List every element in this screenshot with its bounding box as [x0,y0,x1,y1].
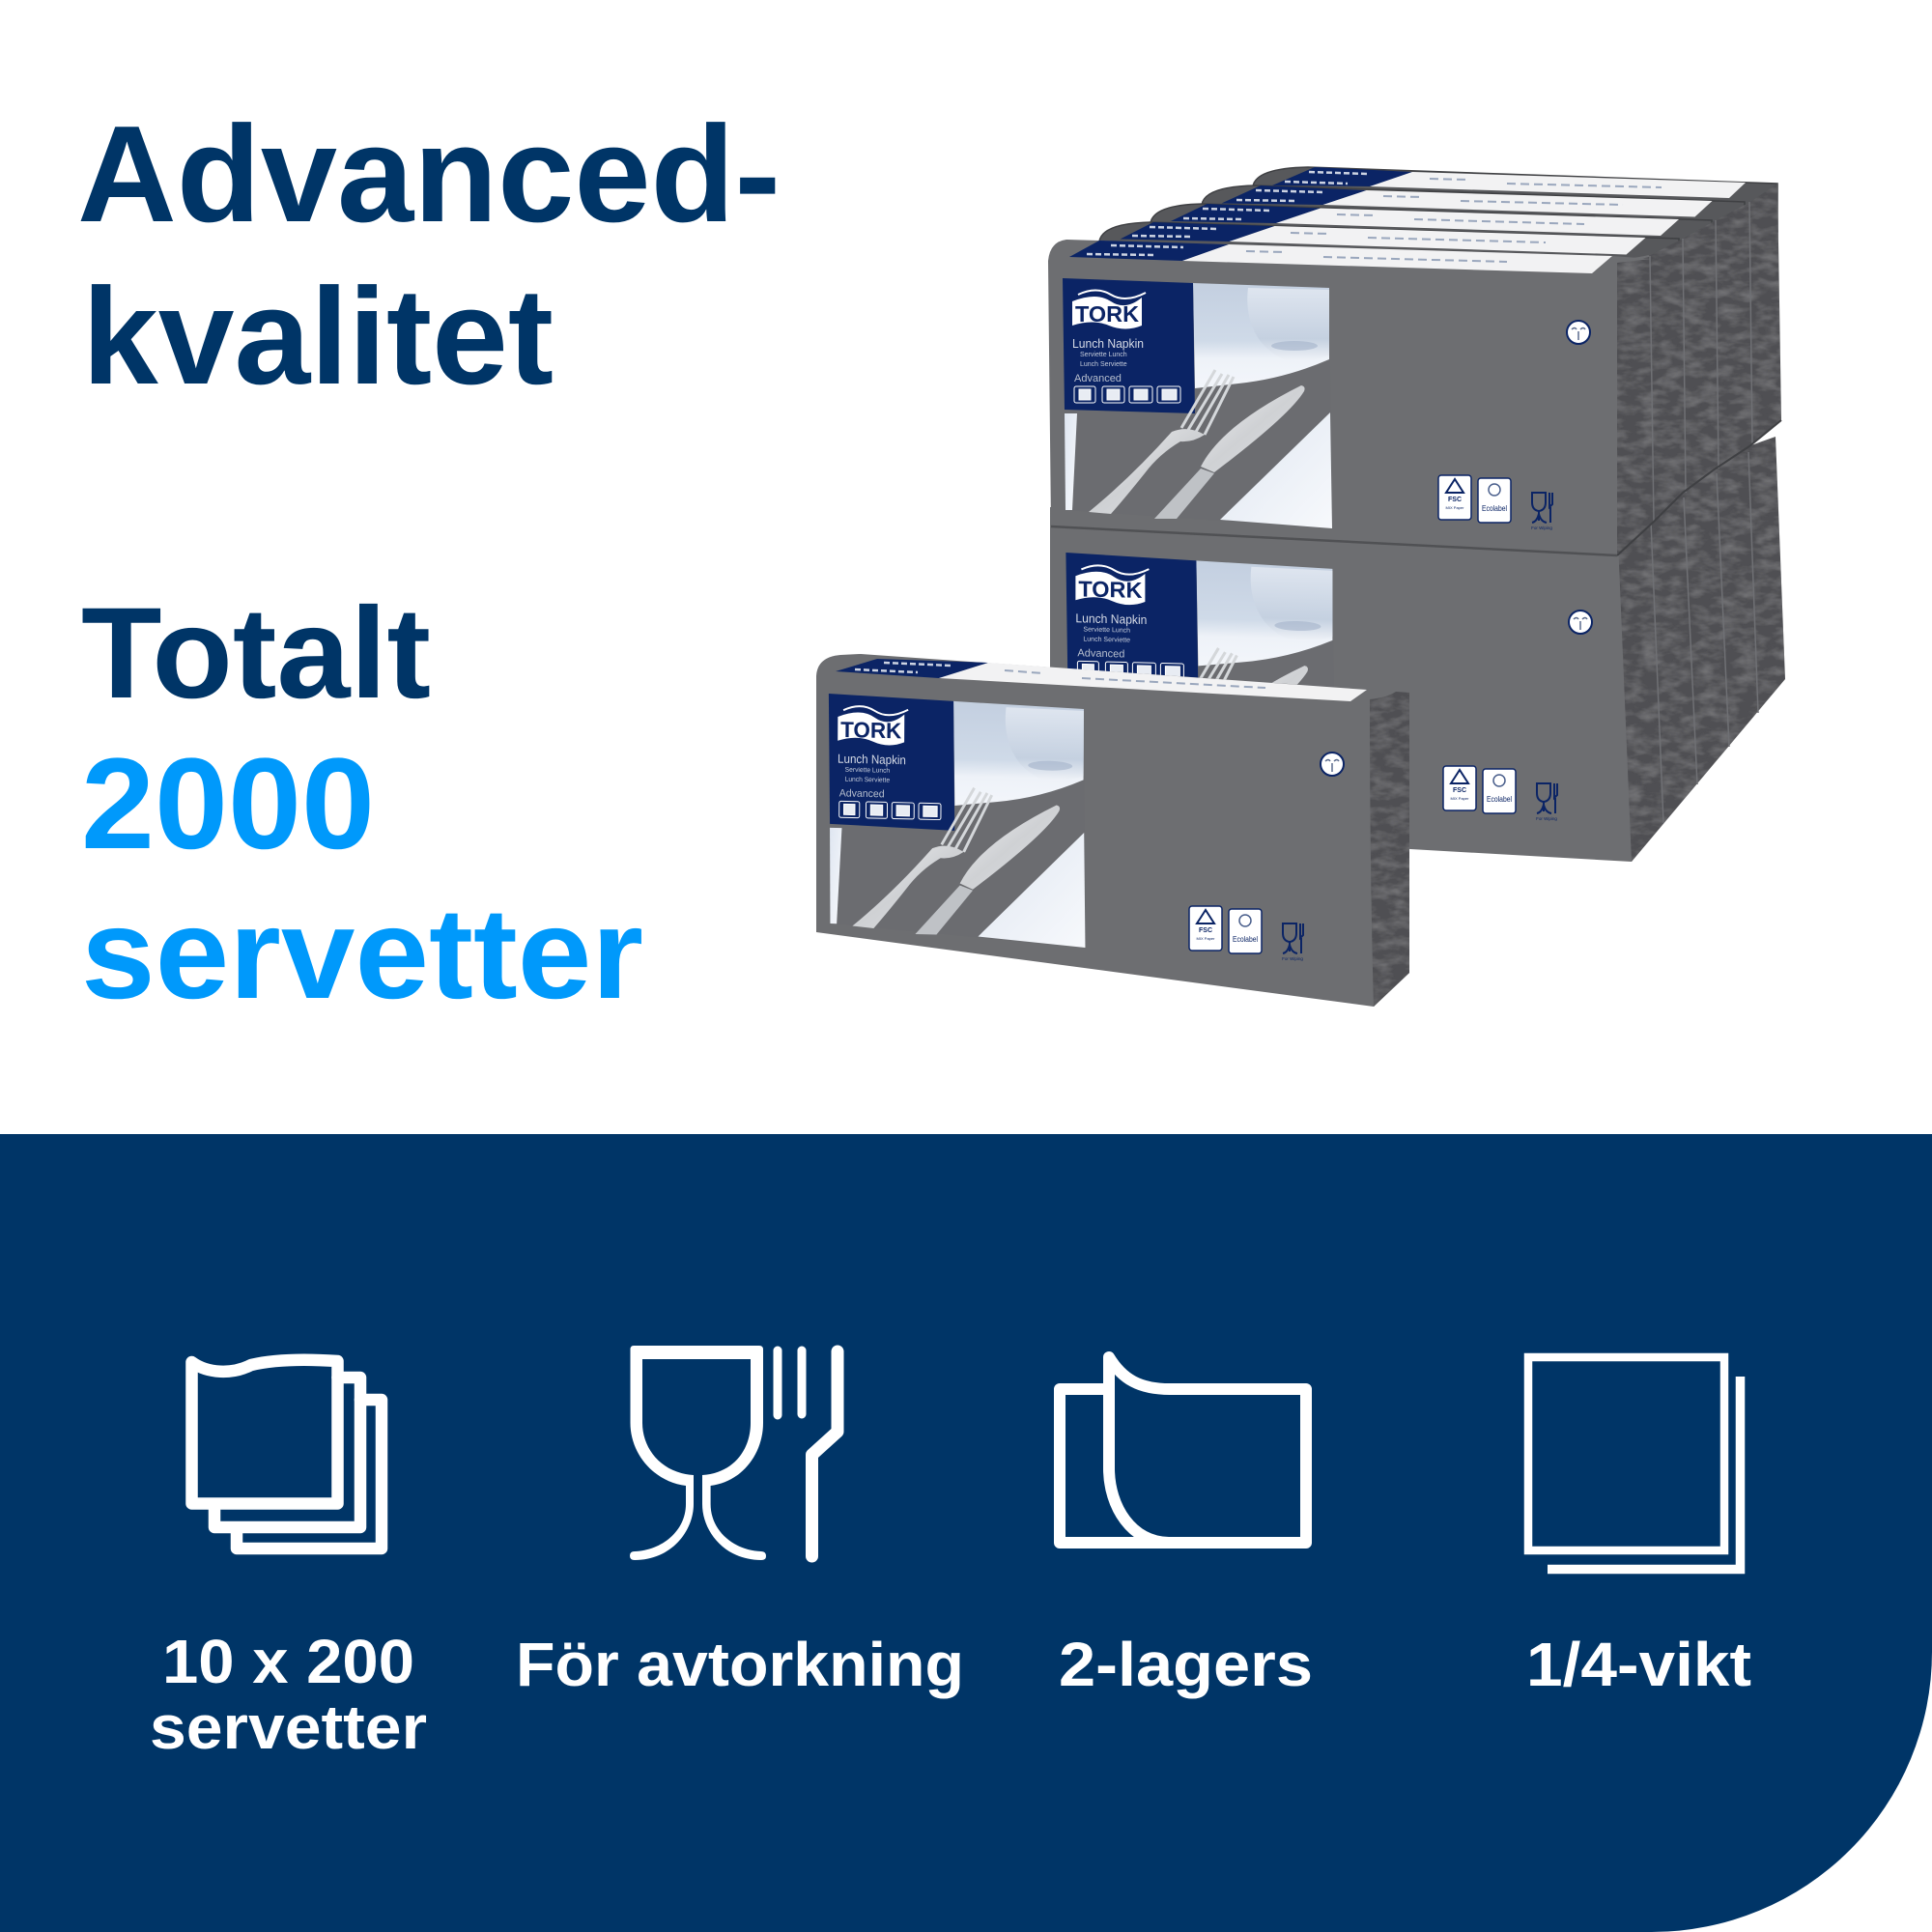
certification labels [1438,475,1552,530]
certification labels: FSC [1199,927,1212,934]
panel: features [0,1134,1932,1932]
label: servetter [150,1692,427,1762]
pack photo: TORK [1075,301,1139,327]
certification labels: MIX Paper [1451,796,1469,801]
heading: Totalt 2000 servetter [81,582,643,1026]
pack photo: Lunch Serviette [1083,636,1130,644]
pack photo: Serviette Lunch [845,767,890,775]
feature: 1/4-vikt [1526,1357,1751,1699]
pack photo: TORK [1078,576,1143,603]
certification labels: For Wiping [1282,956,1303,961]
pack photo: Lunch Napkin [1075,611,1147,627]
pack photo: TORK [840,718,901,743]
icon: quarter fold [1528,1357,1741,1569]
product photo: stacked napkin packs [816,167,1785,1007]
feature: 2-lagers [1059,1357,1313,1699]
certification labels: For Wiping [1531,526,1552,530]
icon: two-ply sheet [1060,1357,1306,1543]
certification labels: MIX Paper [1446,505,1464,510]
icon: glass and fork [630,1346,838,1560]
pack row 1 tops and sides [1099,167,1781,555]
heading: Totalt 2000 servetter: Totalt [81,582,431,725]
pack photo: Advanced [839,787,885,800]
certification labels: For Wiping [1536,816,1557,821]
certification labels: Ecolabel [1233,935,1258,944]
certification labels [1443,766,1557,821]
pack photo [1063,278,1332,528]
label: 10 x 200 [162,1627,414,1696]
front pack body [816,654,1409,1007]
front pack side [1370,692,1409,1007]
seal [1321,753,1344,776]
seal [1567,321,1590,344]
pack photo: Serviette Lunch [1080,352,1127,358]
front pack top label [836,659,1367,701]
pack row 2 front face [1050,507,1632,862]
feature: 10 x 200 servetter [150,1360,427,1762]
certification labels: FSC [1453,787,1466,794]
label: 2-lagers [1059,1630,1313,1699]
pack photo: Advanced [1077,647,1124,661]
icon: napkin stack [191,1360,382,1548]
heading: Totalt 2000 servetter: servetter [81,882,643,1026]
pack photo: Serviette Lunch [1083,626,1130,635]
certification labels [1189,906,1303,961]
pack photo [1065,553,1335,810]
front pack [816,654,1409,1007]
heading: Totalt 2000 servetter: 2000 [81,732,375,876]
title: Advanced-kvalitet: Advanced- [77,98,781,251]
pack row 2 sides [1611,437,1785,862]
certification labels: MIX Paper [1197,936,1215,941]
certification labels: FSC [1448,497,1462,503]
certification labels: Ecolabel [1482,504,1507,513]
pack row 1 top labels [1121,167,1746,255]
pack photo: Lunch Napkin [838,752,906,767]
label: 1/4-vikt [1526,1630,1751,1699]
pack photo: Lunch Napkin [1072,336,1144,351]
pack photo: Lunch Serviette [1080,361,1127,368]
title: Advanced-kvalitet [77,98,781,413]
pack photo [827,694,1087,948]
label: För avtorkning [516,1630,964,1699]
label [150,1627,427,1762]
pack row 1 front face [1048,240,1651,555]
seal [1569,611,1592,634]
certification labels: Ecolabel [1487,795,1512,804]
pack photo: Lunch Serviette [845,777,890,784]
feature: För avtorkning [516,1346,964,1699]
pack photo: Advanced [1074,373,1122,384]
title: Advanced-kvalitet: kvalitet [82,260,554,413]
